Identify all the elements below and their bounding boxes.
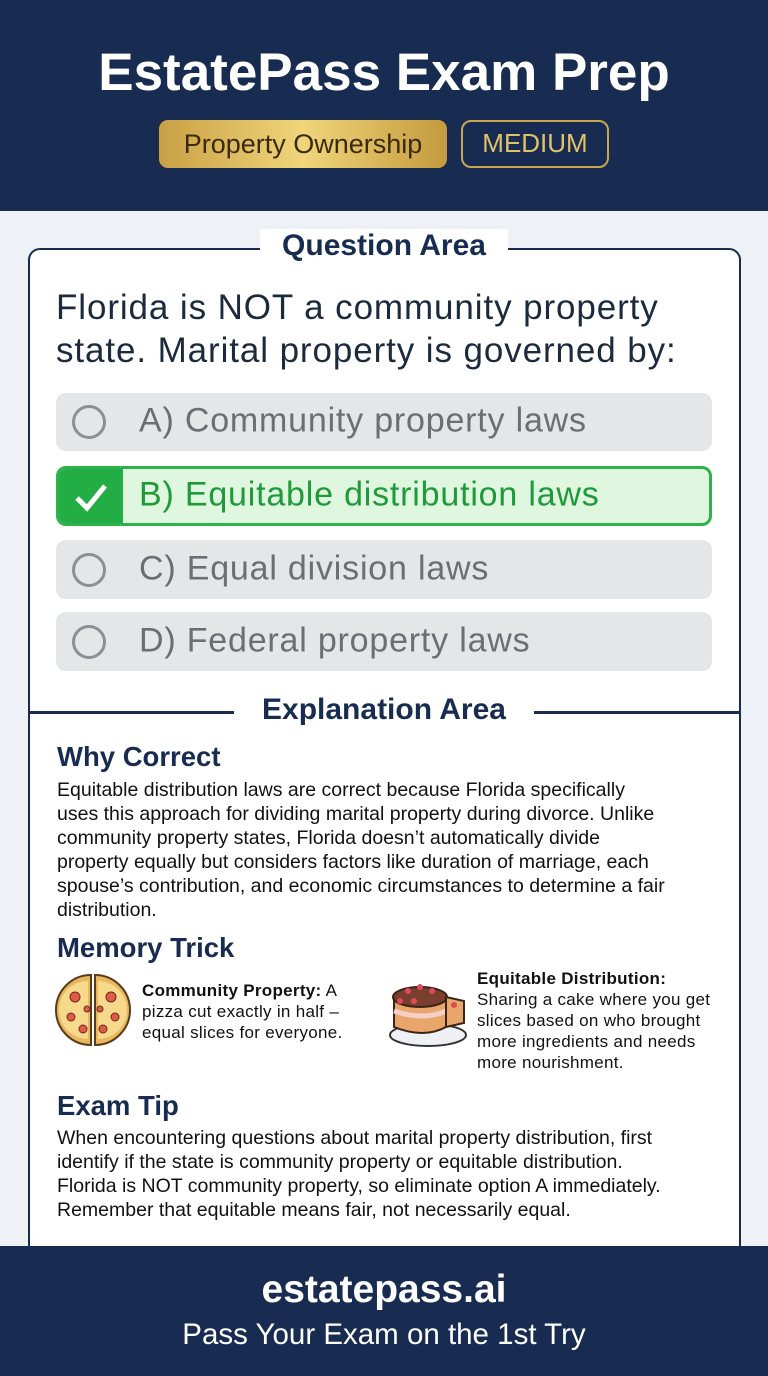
- option C: C) Equal division laws: [139, 549, 489, 587]
- header band: [0, 0, 768, 211]
- exam tip text: When encountering questions about marital property distribution, first: [57, 1127, 652, 1149]
- text: equitable distribution: [477, 969, 710, 1072]
- exam tip text: Florida is NOT community property, so eliminate option A immediately.: [57, 1175, 661, 1197]
- icon: cake: [389, 984, 467, 1047]
- text: community property: Community Property: A: [142, 981, 337, 1000]
- option B correct: B) Equitable distribution laws: [139, 476, 600, 514]
- option B correct: [56, 466, 712, 526]
- question text: [56, 288, 677, 370]
- question text: state. Marital property is governed by:: [56, 331, 677, 370]
- text: equitable distribution: Sharing a cake where you get: [477, 990, 710, 1009]
- why correct text: distribution.: [57, 899, 157, 921]
- text: equitable distribution: Equitable Distribution:: [477, 969, 666, 988]
- text: equitable distribution: slices based on who brought: [477, 1011, 701, 1030]
- exam tip text: Remember that equitable means fair, not necessarily equal.: [57, 1199, 571, 1221]
- why correct text: community property states, Florida doesn’t automatically divide: [57, 827, 600, 849]
- text: community property: equal slices for everyone.: [142, 1023, 343, 1042]
- badge: difficulty: [461, 120, 609, 168]
- badge: topic: [159, 120, 447, 168]
- heading: question area: Question Area: [282, 229, 486, 262]
- heading: exam tip: Exam Tip: [57, 1090, 179, 1121]
- exam tip text: identify if the state is community property or equitable distribution.: [57, 1151, 623, 1173]
- why correct text: property equally but considers factors like duration of marriage, each: [57, 851, 649, 873]
- option D: D) Federal property laws: [139, 621, 530, 659]
- text: community property: [142, 981, 343, 1042]
- text: equitable distribution: more ingredients and needs: [477, 1032, 696, 1051]
- heading: why correct: Why Correct: [57, 741, 220, 772]
- question text: Florida is NOT a community property: [56, 288, 659, 327]
- why correct text: spouse’s contribution, and economic circumstances to determine a fair: [57, 875, 665, 897]
- why correct text: [57, 779, 665, 921]
- why correct text: Equitable distribution laws are correct because Florida specifically: [57, 779, 625, 801]
- option C: [56, 540, 712, 599]
- card panel: [28, 248, 741, 1268]
- text: community property: pizza cut exactly in half –: [142, 1002, 339, 1021]
- footer: [0, 1246, 768, 1376]
- text: equitable distribution: more nourishment.: [477, 1053, 624, 1072]
- title: EstatePass Exam Prep: [98, 43, 670, 102]
- option A: A) Community property laws: [139, 402, 587, 440]
- why correct text: uses this approach for dividing marital property during divorce. Unlike: [57, 803, 654, 825]
- heading: explanation area: Explanation Area: [262, 693, 506, 726]
- badge: topic: Property Ownership: [184, 129, 422, 159]
- icon: pizza: [55, 974, 131, 1046]
- footer url: estatepass.ai: [262, 1268, 506, 1311]
- heading: memory trick: Memory Trick: [57, 932, 234, 963]
- badge: difficulty: MEDIUM: [482, 128, 588, 158]
- exam tip text: [57, 1127, 661, 1221]
- option A: [56, 393, 712, 451]
- footer tagline: Pass Your Exam on the 1st Try: [182, 1318, 586, 1351]
- option D: [56, 612, 712, 671]
